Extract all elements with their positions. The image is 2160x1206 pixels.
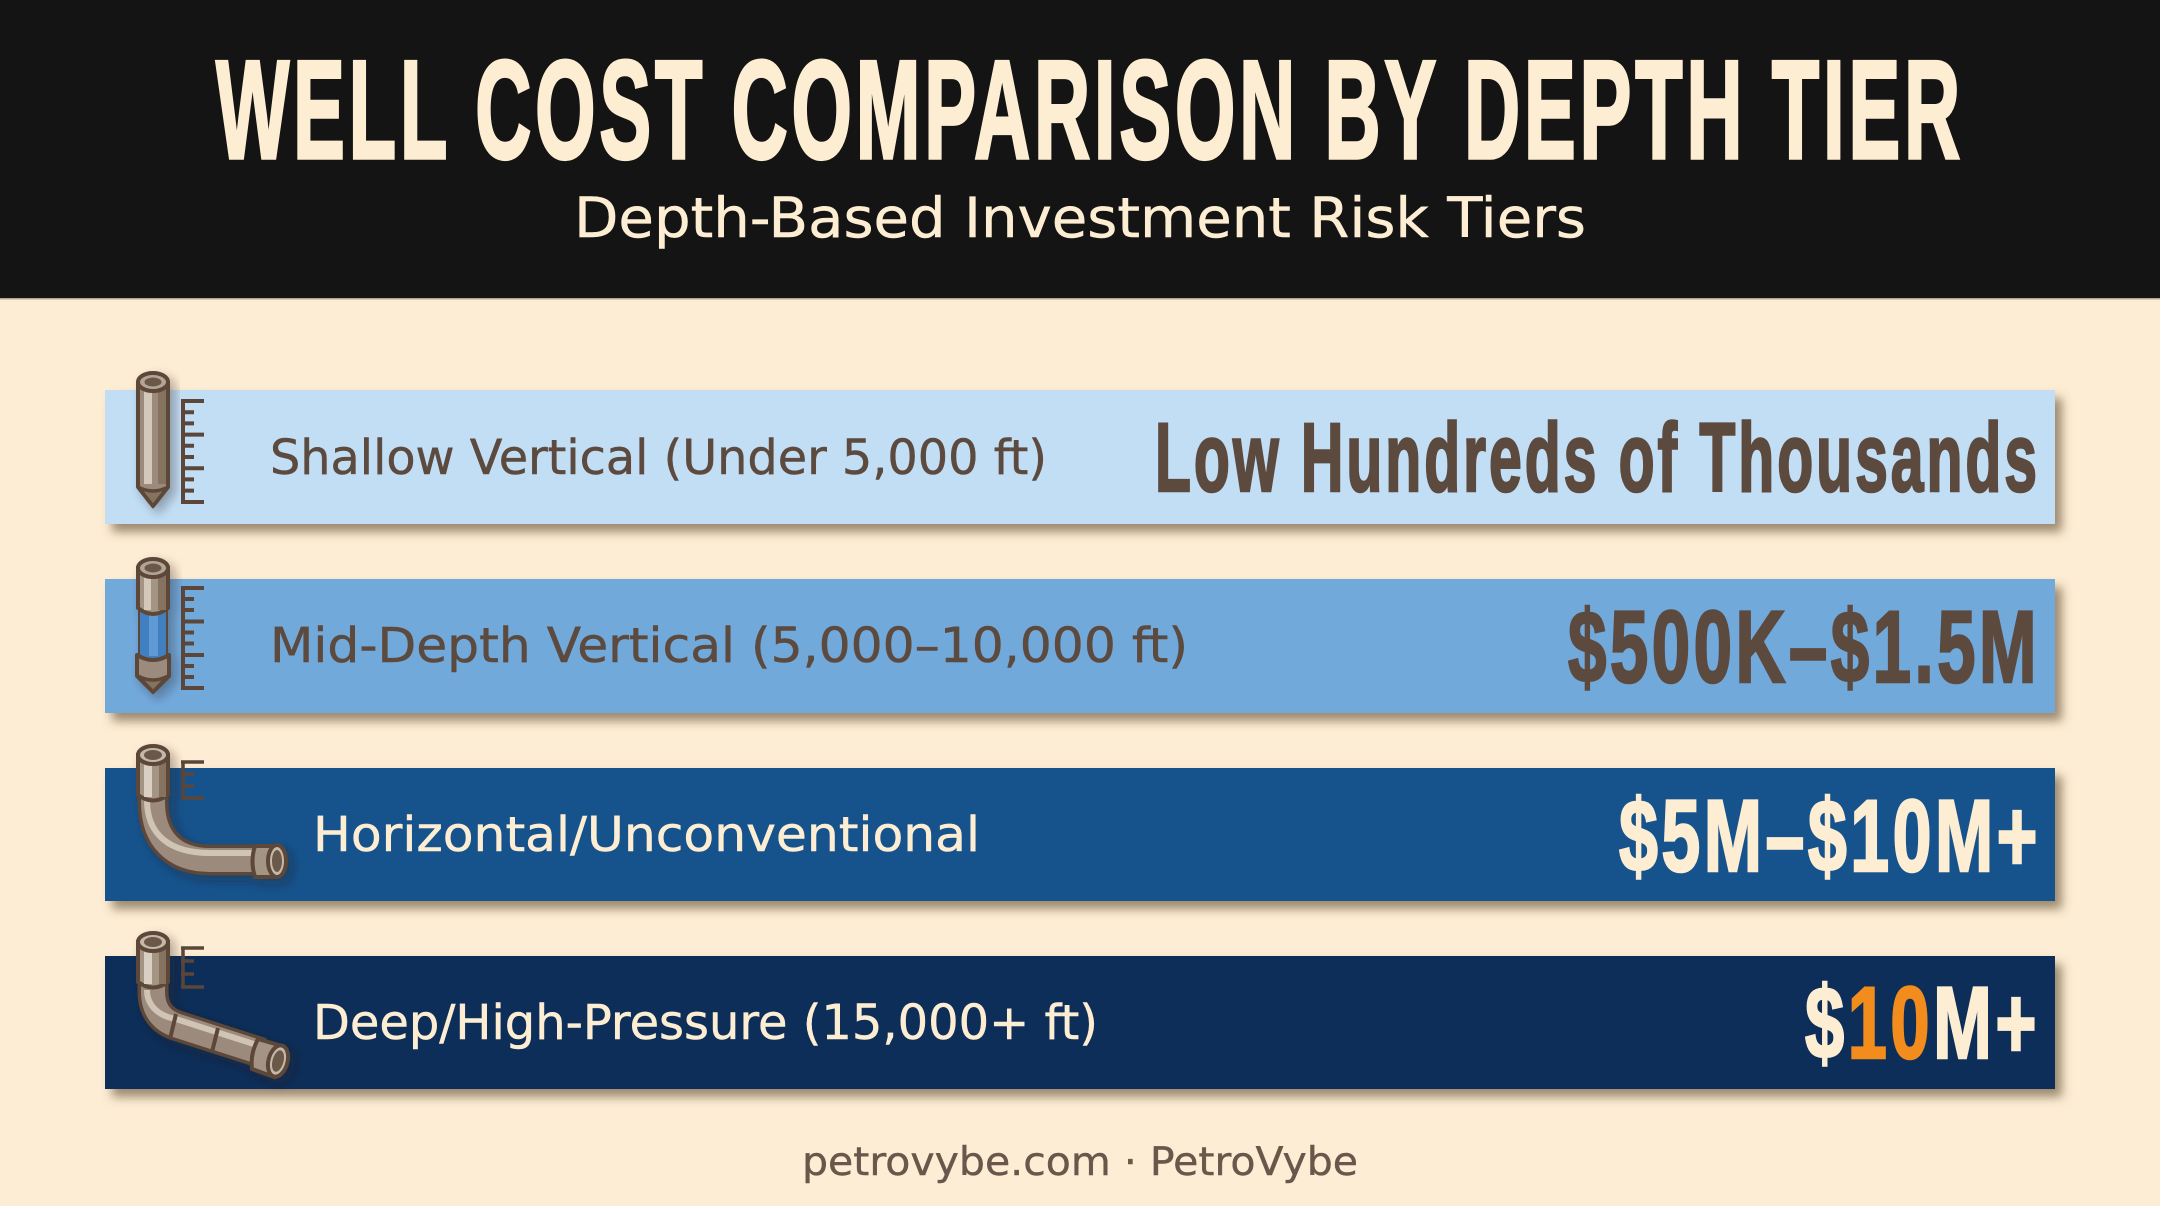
tier row: horizontal/unconventional bbox=[105, 746, 2055, 901]
icon: deep angled pipe with ruler bbox=[138, 933, 291, 1079]
tier row: shallow vertical bbox=[105, 373, 2055, 524]
label: Shallow Vertical (Under 5,000 ft) bbox=[270, 430, 1047, 486]
label: Horizontal/Unconventional bbox=[313, 807, 980, 863]
icon: shallow vertical well pipe with depth ruler bbox=[138, 373, 204, 506]
footer: petrovybe.com · PetroVybe bbox=[802, 1140, 1358, 1185]
label: Deep/High-Pressure (15,000+ ft) bbox=[313, 995, 1098, 1051]
label: Mid-Depth Vertical (5,000–10,000 ft) bbox=[270, 618, 1188, 674]
icon: mid-depth pipe with blue section and ruler bbox=[137, 559, 204, 692]
icon: horizontal pipe with ruler bbox=[138, 746, 286, 877]
header band bbox=[0, 0, 2160, 300]
subtitle: Depth-Based Investment Risk Tiers bbox=[574, 186, 1586, 250]
tier row: deep/high-pressure bbox=[105, 933, 2055, 1089]
tier row: mid-depth vertical bbox=[105, 559, 2055, 713]
value: $10M+ bbox=[1805, 966, 2040, 1080]
